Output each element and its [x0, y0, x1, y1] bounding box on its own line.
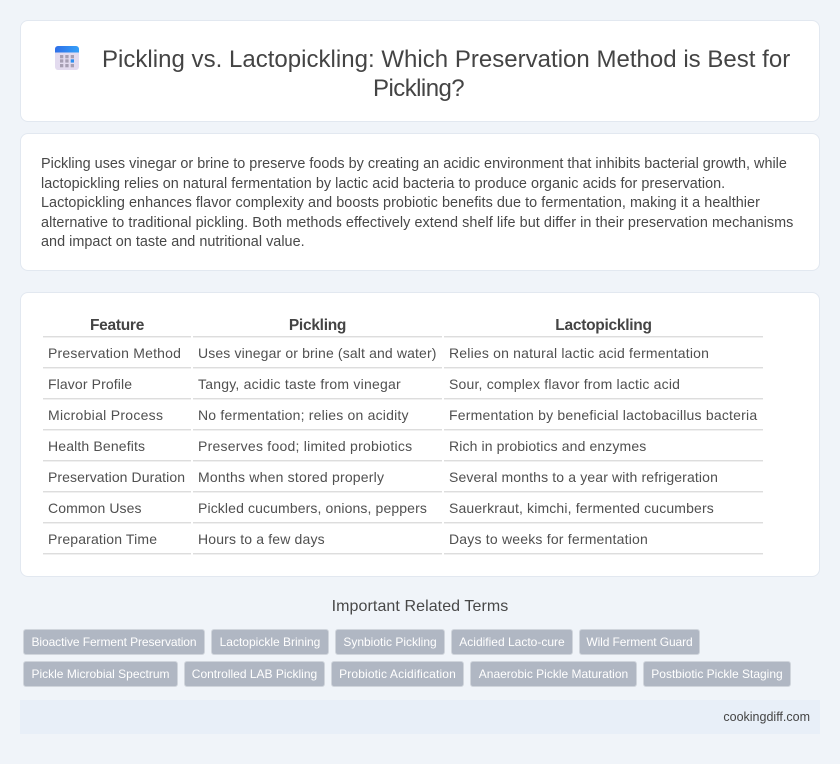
text: source: cookingdiff.com: [723, 710, 810, 724]
row: Common Uses: Pickled cucumbers, onions, peppers: [198, 500, 427, 516]
row: Preservation Duration: Several months to a year with refrigeration: [449, 469, 718, 485]
row: Microbial Process: Fermentation by beneficial lactobacillus bacteria: [449, 407, 757, 423]
tags: related terms: [23, 629, 791, 687]
row: Flavor Profile: [48, 376, 680, 392]
tags: related terms: Postbiotic Pickle Staging: [651, 667, 783, 681]
row: Health Benefits: Health Benefits: [48, 438, 145, 454]
tags: related terms: Controlled LAB Pickling: [192, 667, 317, 681]
tags: related terms: Lactopickle Brining: [220, 635, 320, 649]
row: Preservation Method: Relies on natural lactic acid fermentation: [449, 345, 709, 361]
icon: calendar: [55, 46, 79, 70]
row: Preservation Method: Uses vinegar or brine (salt and water): [198, 345, 437, 361]
text: summary: lactopickling relies on natural fermentation by lactic acid bacteria to produce organic acids for preservation.: [41, 176, 725, 192]
row: Preparation Time: Days to weeks for fermentation: [449, 531, 648, 547]
title: Pickling?: [373, 75, 464, 102]
row: Microbial Process: Microbial Process: [48, 407, 163, 423]
header: Pickling: Pickling: [289, 317, 346, 334]
tags: related terms: Acidified Lacto-cure: [459, 635, 565, 649]
row: Health Benefits: Rich in probiotics and enzymes: [449, 438, 646, 454]
tags: related terms: Pickle Microbial Spectrum: [31, 667, 170, 681]
row: Flavor Profile: Tangy, acidic taste from vinegar: [198, 376, 401, 392]
tags: related terms: Anaerobic Pickle Maturation: [479, 667, 628, 681]
row: Microbial Process: [48, 407, 758, 423]
row: Preservation Duration: [48, 469, 718, 485]
tags: related terms: Bioactive Ferment Preservation: [31, 635, 196, 649]
tags: related terms: Wild Ferment Guard: [586, 635, 693, 649]
row: Flavor Profile: Flavor Profile: [48, 376, 132, 392]
text: summary: alternative to traditional pickling. Both methods effectively extend shelf life but differ in their preservation mechanisms: [41, 215, 793, 231]
title: [102, 46, 790, 102]
heading: Important Related Terms: Important Related Terms: [332, 598, 508, 615]
row: Preparation Time: [48, 531, 648, 547]
row: Preparation Time: Hours to a few days: [198, 531, 325, 547]
row: Flavor Profile: Sour, complex flavor from lactic acid: [449, 376, 680, 392]
row: Common Uses: Common Uses: [48, 500, 142, 516]
row: Common Uses: Sauerkraut, kimchi, fermented cucumbers: [449, 500, 714, 516]
row: Common Uses: [48, 500, 714, 516]
row: Health Benefits: Preserves food; limited probiotics: [198, 438, 412, 454]
panel: summary paragraph: [20, 133, 820, 271]
tags: related terms: Probiotic Acidification: [339, 667, 456, 681]
header: Feature: Feature: [90, 317, 144, 334]
panel: comparison table: [20, 292, 820, 577]
table: comparison: [43, 317, 763, 555]
tags: related terms: Synbiotic Pickling: [343, 635, 437, 649]
text: summary: Pickling uses vinegar or brine to preserve foods by creating an acidic environment that inhibits bacterial growth, while: [41, 156, 787, 172]
text: summary: Lactopickling enhances flavor complexity and boosts probiotic benefits due to fermentation, making it a healthier: [41, 195, 760, 211]
header: Lactopickling: Lactopickling: [555, 317, 652, 334]
panel: title card: [20, 20, 820, 122]
row: Preparation Time: Preparation Time: [48, 531, 157, 547]
text: summary: and impact on taste and nutritional value.: [41, 234, 305, 250]
row: Preservation Duration: Months when stored properly: [198, 469, 384, 485]
text: summary: [41, 156, 793, 250]
row: Preservation Duration: Preservation Duration: [48, 469, 185, 485]
title: Pickling vs. Lactopickling: Which Preservation Method is Best for: [102, 46, 790, 73]
footer bar: [20, 700, 820, 734]
row: Preservation Method: Preservation Method: [48, 345, 181, 361]
row: Preservation Method: [48, 345, 709, 361]
row: Health Benefits: [48, 438, 646, 454]
row: Microbial Process: No fermentation; relies on acidity: [198, 407, 409, 423]
